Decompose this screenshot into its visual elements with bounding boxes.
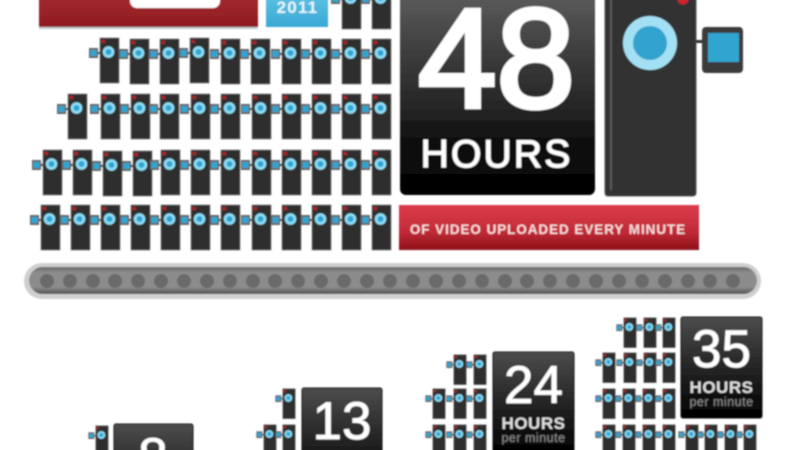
counter: 48 hours	[400, 0, 595, 195]
counter: 8 hours	[114, 424, 193, 450]
large camera	[605, 0, 743, 196]
camera rows: 48 hours	[30, 0, 391, 250]
counter: 24 hours: HOURS	[502, 414, 565, 433]
counter: 35 hours: HOURS	[690, 378, 753, 397]
counter: 24 hours: per minute	[501, 431, 566, 445]
cameras: 13 hours	[256, 389, 295, 450]
counter: 35 hours: 35	[692, 320, 751, 379]
timeline strip	[24, 263, 761, 299]
cameras: 24 hours	[425, 355, 486, 450]
cameras: 35 hours	[595, 318, 756, 450]
counter: 35 hours: per minute	[689, 395, 754, 409]
caption bar: OF VIDEO UPLOADED EVERY MINUTE	[410, 222, 686, 237]
counter: 24 hours	[493, 352, 574, 450]
counter: 13 hours: 13	[313, 392, 371, 450]
red logo banner	[39, 0, 258, 29]
counter: 13 hours	[302, 388, 382, 450]
cameras: 8 hours	[88, 426, 108, 450]
caption bar	[399, 205, 699, 250]
counter: 24 hours: 24	[504, 356, 563, 415]
counter: 35 hours	[681, 317, 762, 418]
counter: 48 hours: HOURS	[421, 133, 572, 176]
year badge	[266, 0, 328, 27]
